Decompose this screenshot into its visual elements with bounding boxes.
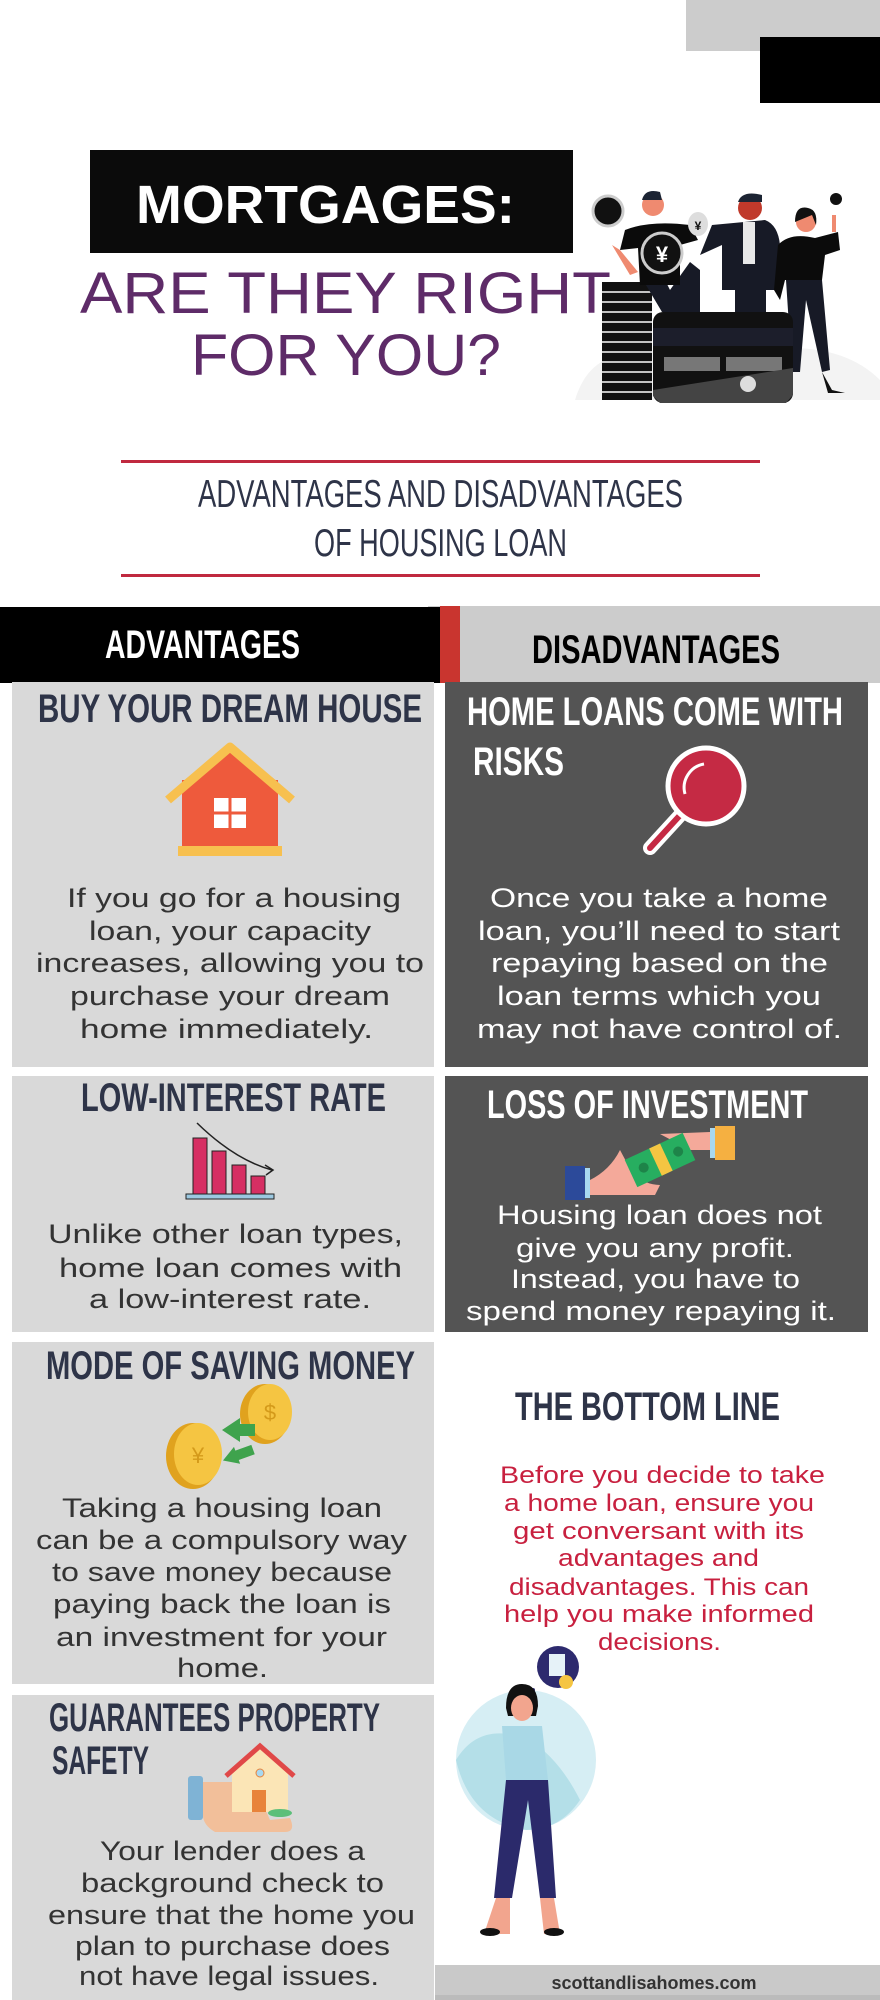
panel: home loans come with risks: loan, you’ll need to start (478, 916, 841, 946)
subtitle question: FOR YOU? (191, 323, 501, 388)
panel: loss of investment: Instead, you have to (511, 1264, 800, 1294)
panel: low-interest rate: LOW-INTEREST RATE (81, 1076, 386, 1120)
panel: loss of investment: spend money repaying it. (466, 1296, 836, 1326)
panel: mode of saving money (12, 1342, 434, 1684)
panel: buy your dream house: loan, your capacity (89, 916, 372, 946)
money bag: ¥ (695, 219, 702, 233)
panel: the bottom line: get conversant with its (513, 1518, 804, 1545)
header: advantages / disadvantages: DISADVANTAGES (532, 628, 780, 672)
panel: mode of saving money: paying back the loan is (53, 1589, 391, 1619)
panel: mode of saving money: Taking a housing loan (62, 1493, 382, 1523)
subtitle question (80, 261, 611, 388)
illustration: thinking woman (456, 1646, 596, 1936)
panel: home loans come with risks (445, 682, 868, 1067)
panel: the bottom line: decisions. (598, 1629, 721, 1656)
icon: magnifier (650, 748, 744, 848)
panel: low-interest rate: Unlike other loan types, (48, 1219, 403, 1249)
panel: guarantees property safety: not have legal issues. (79, 1961, 379, 1991)
panel: buy your dream house: BUY YOUR DREAM HOUSE (38, 687, 422, 731)
panel: the bottom line: Before you decide to take (500, 1462, 825, 1489)
man 1: ¥ (656, 242, 669, 267)
panel: mode of saving money: to save money because (52, 1557, 392, 1587)
illustration: business people with card (575, 191, 880, 403)
panel: guarantees property safety: SAFETY (52, 1739, 149, 1783)
panel: loss of investment (445, 1076, 868, 1332)
icon: house in hand (188, 1745, 294, 1832)
panel: guarantees property safety (12, 1695, 434, 2000)
icon: coins exchange: ¥ (191, 1443, 205, 1468)
subtitle question: ARE THEY RIGHT (80, 261, 611, 326)
panel: home loans come with risks: Once you take a home (490, 883, 828, 913)
panel: home loans come with risks: may not have control of. (477, 1014, 842, 1044)
money bag (688, 212, 708, 236)
panel: buy your dream house: purchase your dream (70, 981, 390, 1011)
panel: buy your dream house: increases, allowing you to (36, 948, 424, 978)
panel: low-interest rate: a low-interest rate. (89, 1284, 371, 1314)
header: advantages / disadvantages (0, 606, 880, 683)
panel: guarantees property safety: GUARANTEES PROPERTY (49, 1696, 380, 1740)
panel: mode of saving money: an investment for your (56, 1622, 387, 1652)
panel: guarantees property safety: plan to purchase does (75, 1931, 390, 1961)
panel: the bottom line: help you make informed (504, 1601, 814, 1628)
icon: coins exchange: $ (264, 1400, 276, 1425)
footer: website (435, 1965, 880, 2000)
panel: guarantees property safety: background check to (81, 1868, 384, 1898)
footer: website: scottandlisahomes.com (551, 1973, 757, 1993)
panel: the bottom line: advantages and (558, 1545, 759, 1572)
man 2 (700, 194, 780, 312)
panel: loss of investment: give you any profit. (516, 1233, 794, 1263)
icon: house (168, 745, 292, 856)
icon: coins exchange (166, 1384, 292, 1489)
panel: the bottom line (500, 1385, 825, 1656)
coin stack (602, 282, 652, 400)
panel: mode of saving money: can be a compulsory way (36, 1525, 408, 1555)
panel: low-interest rate (12, 1076, 434, 1332)
panel: the bottom line: a home loan, ensure you (504, 1490, 814, 1517)
panel: guarantees property safety: Your lender does a (100, 1836, 366, 1866)
panel: mode of saving money: MODE OF SAVING MONEY (46, 1344, 415, 1388)
panel: home loans come with risks: loan terms which you (497, 981, 821, 1011)
panel: low-interest rate: home loan comes with (59, 1253, 402, 1283)
divider lines with heading (121, 460, 760, 577)
panel: home loans come with risks: RISKS (473, 740, 564, 784)
divider lines with heading: ADVANTAGES AND DISADVANTAGES (198, 473, 683, 516)
decoration: top right blocks (686, 0, 880, 103)
woman (774, 193, 845, 393)
title box: MORTGAGES: (136, 175, 515, 235)
panel: home loans come with risks: repaying based on the (491, 948, 828, 978)
panel: mode of saving money: home. (177, 1653, 268, 1683)
panel: the bottom line: THE BOTTOM LINE (515, 1385, 780, 1429)
panel: the bottom line: disadvantages. This can (509, 1574, 809, 1601)
title box (90, 150, 573, 253)
man 1 (612, 191, 700, 312)
icon: declining bar chart (186, 1123, 274, 1199)
panel: buy your dream house: home immediately. (80, 1014, 373, 1044)
panel: guarantees property safety: ensure that the home you (48, 1900, 415, 1930)
card (653, 312, 793, 403)
panel: buy your dream house: If you go for a housing (67, 883, 401, 913)
divider lines with heading: OF HOUSING LOAN (314, 522, 567, 565)
header: advantages / disadvantages: ADVANTAGES (105, 623, 300, 667)
panel: loss of investment: Housing loan does not (497, 1200, 823, 1230)
panel: buy your dream house (12, 682, 434, 1067)
icon: money exchange hands (565, 1126, 735, 1200)
